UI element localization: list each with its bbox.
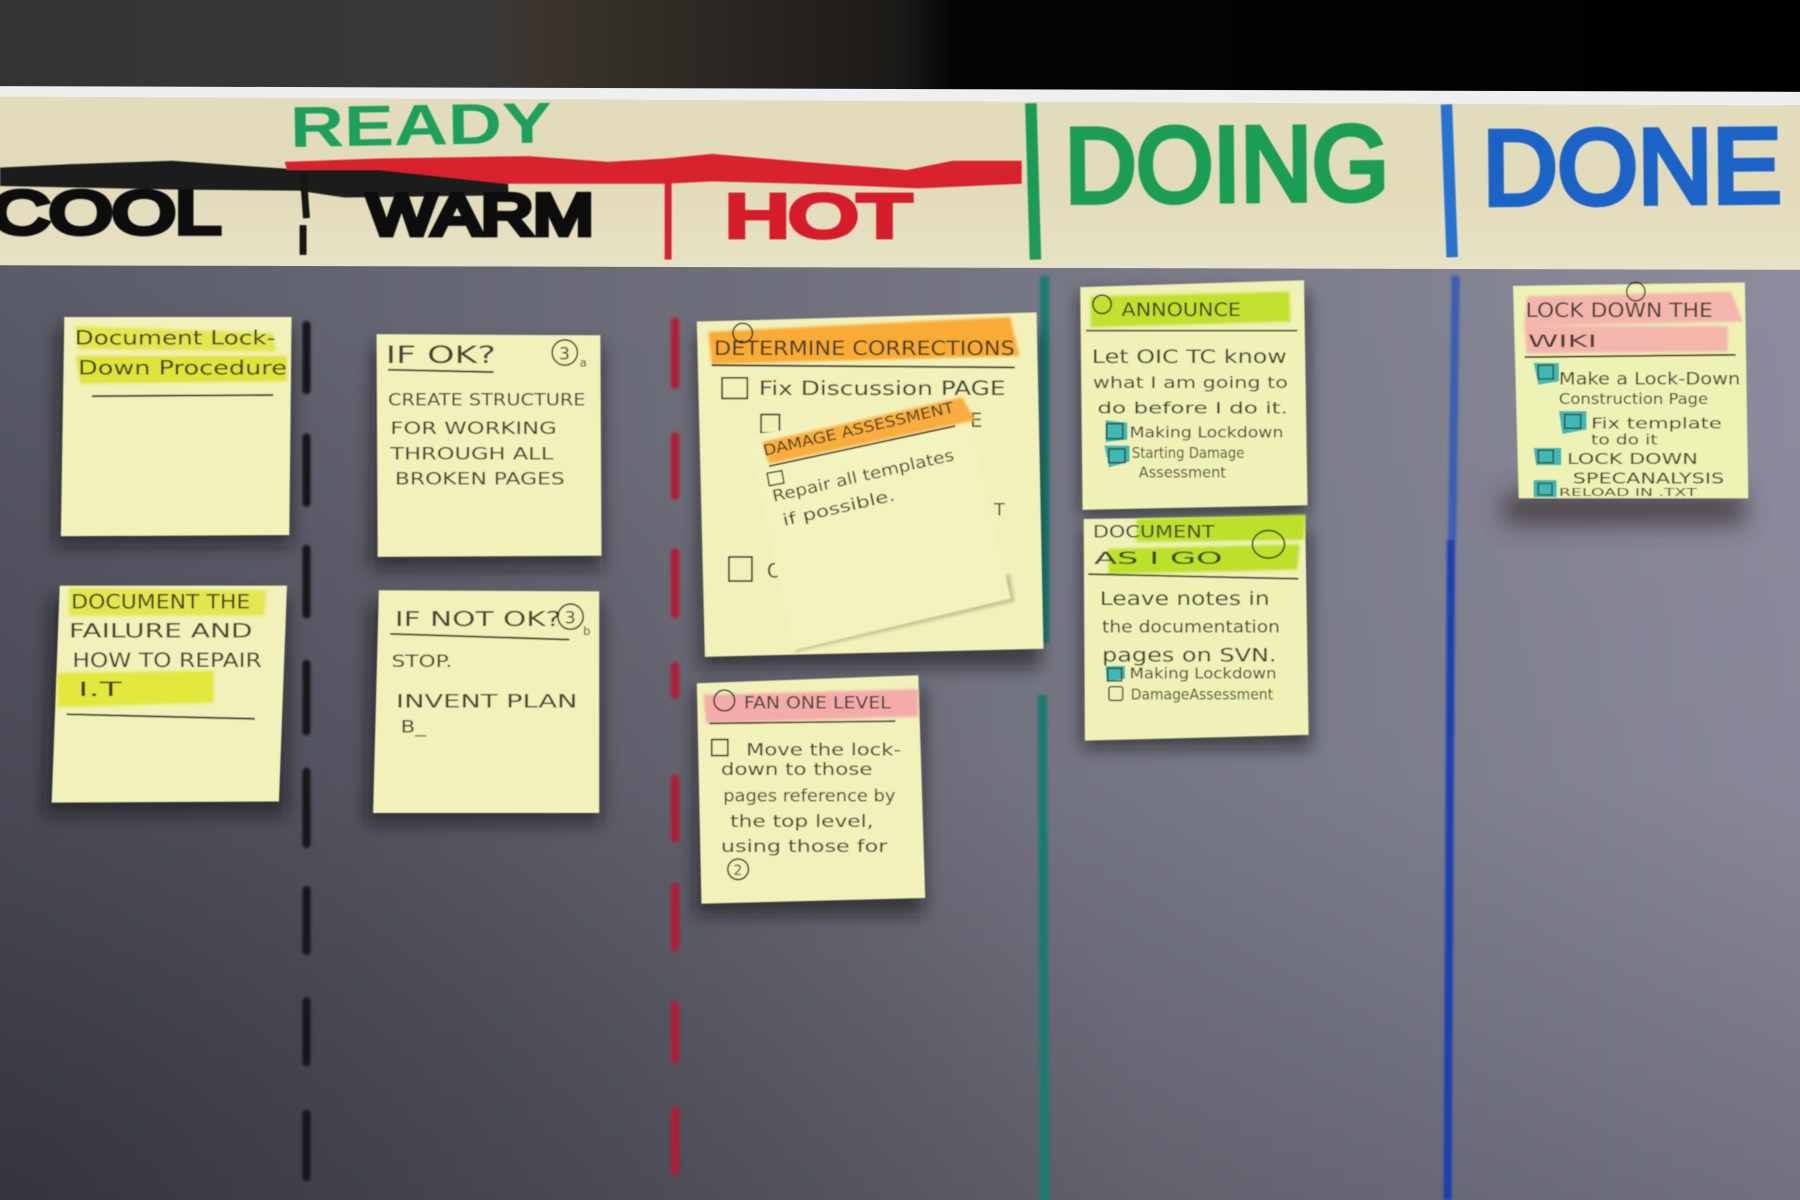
sticky note: Announce: ANNOUNCE xyxy=(1122,300,1241,321)
sticky note: Document as I go: Leave notes in xyxy=(1100,589,1270,610)
sticky note: Document the failure: I.T xyxy=(78,678,122,701)
sticky note: Document lock-down procedure: Document Lock- xyxy=(75,326,276,349)
sticky note: Lock down the wiki: LOCK DOWN THE xyxy=(1526,299,1713,322)
column headers xyxy=(0,91,1782,260)
ready swimlane bar: red xyxy=(285,154,1022,188)
sticky note: Lock down the wiki xyxy=(1513,282,1748,499)
sticky note: Document as I go: DamageAssessment xyxy=(1131,685,1273,703)
blue divider xyxy=(1452,276,1456,540)
sticky note: Document as I go: Making Lockdown xyxy=(1130,665,1277,683)
sticky note: If OK?: CREATE STRUCTURE xyxy=(388,390,585,410)
sticky note: Fan one level: FAN ONE LEVEL xyxy=(744,694,891,714)
sticky note: If OK?: IF OK? xyxy=(386,341,496,369)
heading: WARM: WARM xyxy=(367,183,593,247)
sticky note: Lock down the wiki: WIKI xyxy=(1528,332,1597,352)
sticky note: Document as I go: AS I GO xyxy=(1094,549,1223,569)
heading: DOING: DOING xyxy=(1064,104,1389,225)
sticky note: Announce: what I am going to xyxy=(1093,373,1288,392)
sticky note: Document the failure: HOW TO REPAIR xyxy=(72,649,262,672)
sticky note: Lock down the wiki: Fix template xyxy=(1591,414,1722,432)
sticky note: If OK?: a xyxy=(580,355,587,369)
sticky note: Damage assessment: DAMAGE ASSESSMENT xyxy=(761,398,957,460)
sticky note: Fan one level: using those for xyxy=(721,837,889,857)
sticky note: Announce: do before I do it. xyxy=(1097,398,1288,417)
sticky note: Fan one level: 2 xyxy=(734,863,742,879)
sticky note: Lock down the wiki: LOCK DOWN xyxy=(1567,450,1698,468)
sticky note: Damage assessment: if possible. xyxy=(781,485,897,530)
sticky note: Damage assessment: Repair all templates xyxy=(770,445,956,506)
sticky note: If OK?: 3 xyxy=(559,344,570,364)
sticky note: If not OK?: INVENT PLAN xyxy=(396,691,577,712)
sticky note: Fan one level: down to those xyxy=(721,760,872,780)
sticky note: If not OK?: 3 xyxy=(565,609,576,629)
sticky note: If OK?: BROKEN PAGES xyxy=(395,470,565,490)
ready swimlane bar: black xyxy=(0,161,509,198)
black dashed divider xyxy=(303,325,310,1177)
sticky note: Damage assessment xyxy=(747,397,1015,652)
sticky note: Announce: Making Lockdown xyxy=(1130,424,1283,442)
dark background above the board xyxy=(0,0,1800,92)
sticky note: Document as I go: DOCUMENT xyxy=(1093,522,1215,542)
note shadows xyxy=(44,293,1311,915)
heading: READY: READY xyxy=(290,91,552,160)
sticky note: Fan one level: pages reference by xyxy=(723,787,895,807)
sticky note: Document the failure: DOCUMENT THE xyxy=(71,591,250,614)
sticky note: If not OK?: b xyxy=(583,624,590,638)
heading: HOT: HOT xyxy=(726,183,911,250)
column divider lines on board xyxy=(307,276,1456,1200)
sticky note: Lock down the wiki: Construction Page xyxy=(1559,390,1708,408)
sticky note: Document lock-down procedure: Down Procedure xyxy=(78,356,287,379)
grey board surface xyxy=(0,264,1800,1200)
sticky note: Document as I go xyxy=(1084,514,1309,741)
tape dividers xyxy=(303,172,307,255)
red dashed divider xyxy=(672,322,678,1171)
sticky note: Determine corrections: Fix Discussion PAGE xyxy=(759,377,1006,400)
sticky note: Announce: Assessment xyxy=(1139,464,1226,482)
sticky note: Fan one level: the top level, xyxy=(730,812,874,832)
done note warm shadow xyxy=(1504,494,1745,524)
sticky note: Lock down the wiki: Make a Lock-Down xyxy=(1559,370,1740,390)
sticky note: If OK? xyxy=(377,334,602,557)
sticky note: If OK?: FOR WORKING xyxy=(390,419,557,439)
sticky note: If OK?: THROUGH ALL xyxy=(389,444,554,464)
sticky note: Fan one level: Move the lock- xyxy=(746,741,901,761)
sticky note: If not OK?: STOP. xyxy=(391,652,452,672)
sticky note: Fan one level xyxy=(697,675,925,904)
sticky note: Determine corrections: E xyxy=(970,409,982,432)
sticky note: Document as I go: the documentation xyxy=(1102,618,1280,638)
sticky note: Document the failure: FAILURE AND xyxy=(69,619,253,642)
sticky note: If not OK?: IF NOT OK? xyxy=(395,607,561,631)
sticky note: If not OK? xyxy=(373,590,599,813)
sticky note: Document as I go: pages on SVN. xyxy=(1102,645,1277,666)
sticky note: Document the failure xyxy=(52,586,287,803)
sticky note: Lock down the wiki: to do it xyxy=(1591,432,1658,448)
sticky note: Determine corrections: T xyxy=(993,501,1005,521)
sticky note: Document lock-down procedure xyxy=(61,317,292,536)
sticky note: Announce: Let OIC TC know xyxy=(1092,347,1287,368)
header tape strip xyxy=(0,96,1800,270)
sticky note: Lock down the wiki: RELOAD IN .TXT xyxy=(1559,487,1698,499)
sticky note: Announce: Starting Damage xyxy=(1132,444,1244,462)
teal divider xyxy=(1042,276,1045,1200)
heading: DONE: DONE xyxy=(1482,107,1782,227)
sticky note: Determine corrections: DETERMINE CORRECTIONS xyxy=(714,337,1015,360)
white top rail xyxy=(0,86,1800,106)
sticky note: Announce xyxy=(1080,280,1308,510)
sticky note: If not OK?: B_ xyxy=(401,718,426,738)
sticky note: Determine corrections xyxy=(697,312,1043,657)
sticky note: Lock down the wiki: SPECANALYSIS xyxy=(1573,469,1724,487)
sticky note: Determine corrections: O xyxy=(767,560,782,583)
